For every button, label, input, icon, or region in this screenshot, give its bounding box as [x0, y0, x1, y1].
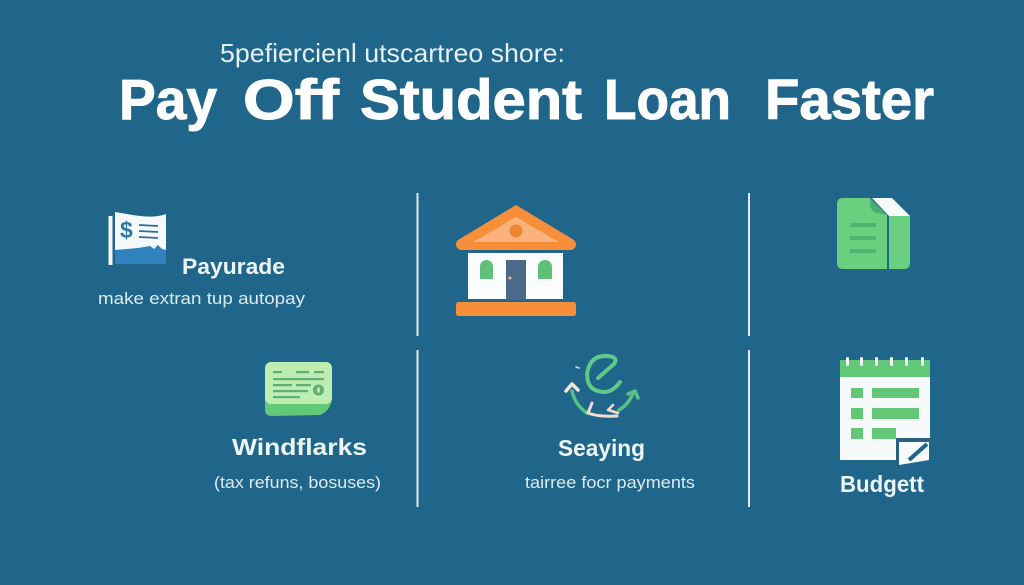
icon: cash card: [265, 362, 332, 416]
subtitle: 5pefiercienl utscartreo shore:: [220, 38, 565, 68]
icon: pay statement flag: $: [120, 217, 133, 243]
text: tairree focr payments: tairree focr payments: [525, 473, 695, 492]
icon: budget calendar: [840, 357, 930, 466]
icon: pay statement flag: [108, 212, 166, 265]
heading: Seaying: Seaying: [558, 435, 645, 461]
title: [119, 68, 934, 132]
title: Pay: [119, 68, 217, 132]
heading: Budgett: Budgett: [840, 471, 924, 497]
title: Off: [243, 68, 340, 132]
heading: Payurade: Payurade: [182, 254, 285, 279]
text: make extran tup autopay: make extran tup autopay: [98, 289, 306, 308]
title: Loan: [604, 68, 731, 132]
icon: house: [456, 205, 576, 316]
title: Faster: [765, 68, 934, 132]
title: Student: [360, 68, 582, 132]
text: tax refunds: (tax refuns, bosuses): [214, 473, 381, 492]
icon: recycling arrows with e: [566, 356, 638, 416]
heading: Windflarks: Windflarks: [232, 434, 367, 460]
icon: document: [837, 198, 910, 269]
